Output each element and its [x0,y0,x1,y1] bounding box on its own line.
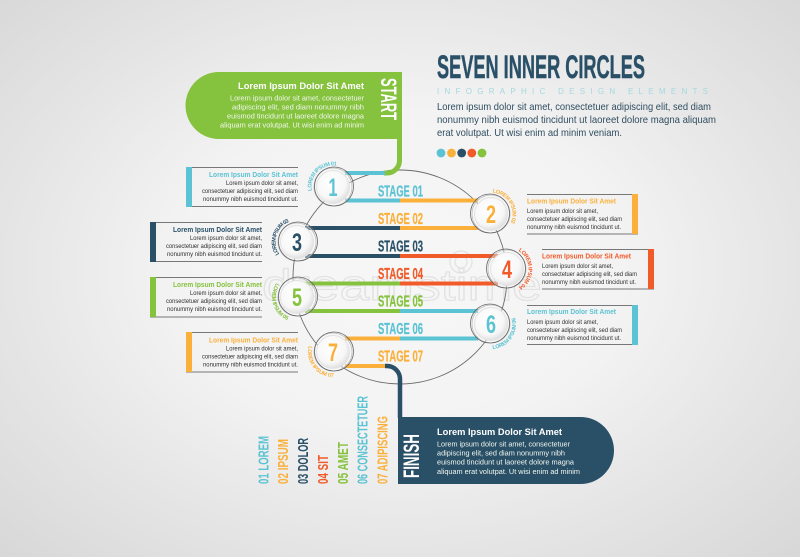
stage labels: STAGE 03 [378,238,423,256]
start text: Lorem Ipsum Dolor Sit Amet [238,81,365,92]
start connector [384,139,400,173]
title: SEVEN INNER CIRCLES [437,49,645,85]
node 1: 1 [328,174,338,202]
stage labels: STAGE 05 [378,294,423,310]
panel: item 3 [150,222,262,262]
panel: item 7 [186,332,298,372]
panel: item 5: Lorem Ipsum Dolor Sit Amet [173,280,262,289]
panel: item 6: consectetuer adipiscing elit, sed diam [527,327,622,334]
stage labels: STAGE 04 [378,266,423,283]
finish text: adipiscing elit, sed diam nonummy nibh [437,450,565,458]
node 4: 4 [502,256,512,284]
finish text [437,427,580,476]
vertical legend: 03 DOLOR [295,438,312,484]
panel: item 5: nonummy nibh euismod tincidunt ut. [167,306,262,313]
vertical legend: 01 LOREM [256,436,272,484]
panel: item 5: consectetuer adipiscing elit, sed diam [166,298,262,305]
start text [220,81,365,130]
colour dots [437,149,486,157]
subtitle: INFOGRAPHIC DESIGN ELEMENTS [437,87,708,96]
panel: item 6 [527,305,638,345]
panel: item 4: nonummy nibh euismod tincidunt ut. [542,279,636,286]
panel: item 2: Lorem ipsum dolor sit amet, [527,208,598,215]
panel: item 6: Lorem Ipsum Dolor Sit Amet [527,307,616,316]
panel: item 1: Lorem ipsum dolor sit amet, [226,180,298,187]
vertical legend: 05 AMET [335,442,352,484]
finish connector [385,366,400,418]
start text: adipiscing elit, sed diam nonummy nibh [232,104,364,112]
vertical legend [256,396,392,484]
panel: item 4: Lorem ipsum dolor sit amet, [542,263,613,270]
intro paragraph: nonummy nibh euismod tincidunt ut laoreet dolore magna aliquam [437,115,716,126]
node 3 [272,219,318,262]
watermark: dreamstime [262,261,542,310]
panel: item 5: Lorem ipsum dolor sit amet, [190,290,262,297]
node 4 [486,248,532,290]
vertical legend: 07 ADIPISCING [374,416,392,484]
panel: item 7: nonummy nibh euismod tincidunt ut. [203,362,298,368]
panel: item 7: Lorem ipsum dolor sit amet, [226,346,298,352]
node 3: 3 [292,229,302,257]
vertical legend: 06 CONSECTETUER [354,396,372,484]
panel: item 3: Lorem Ipsum Dolor Sit Amet [173,225,262,234]
finish text: aliquam erat volutpat. Ut wisi enim ad minim [437,469,580,476]
intro paragraph [437,102,716,139]
panel: item 1: Lorem Ipsum Dolor Sit Amet [209,170,298,179]
node 6: LOREM IPSUM 06 [492,318,516,349]
panel: item 3: consectetuer adipiscing elit, sed diam [166,243,262,250]
stage labels: STAGE 07 [378,348,423,366]
stage labels [378,184,423,366]
finish text: Lorem ipsum dolor sit amet, consectetuer [437,442,571,448]
panel: item 5 [150,277,262,317]
panel: item 1: consectetuer adipiscing elit, sed diam [202,188,298,195]
panel: item 2 [527,194,638,234]
start text: euismod tincidunt ut laoreet dolore magna [227,114,364,120]
panel: item 6: Lorem ipsum dolor sit amet, [527,319,598,326]
panel: item 1 [186,167,298,207]
node 1 [308,162,354,206]
start text: Lorem ipsum dolor sit amet, consectetuer [230,96,365,102]
panel: item 7: Lorem Ipsum Dolor Sit Amet [209,336,298,344]
panel: item 4: consectetuer adipiscing elit, sed diam [542,271,637,278]
large ring [293,170,507,384]
node 1: LOREM IPSUM 01 [308,162,336,191]
panel: item 2: nonummy nibh euismod tincidunt ut. [527,224,621,231]
stage labels: STAGE 01 [378,184,423,200]
start text: aliquam erat volutpat. Ut wisi enim ad minim [220,122,364,130]
panel: item 4: Lorem Ipsum Dolor Sit Amet [542,252,631,260]
panel: item 3: nonummy nibh euismod tincidunt ut. [167,251,262,258]
node 2: LOREM IPSUM 02 [492,188,516,224]
start panel [186,72,402,139]
panel: item 6: nonummy nibh euismod tincidunt ut. [527,335,621,342]
node 5: LOREM IPSUM 05 [272,283,289,320]
finish text: euismod tincidunt ut laoreet dolore magna [437,460,574,466]
panel: item 4 [542,249,654,289]
panel: item 7: consectetuer adipiscing elit, sed diam [202,354,298,360]
finish text: Lorem Ipsum Dolor Sit Amet [437,427,563,438]
finish panel [398,417,614,484]
panel: item 2: consectetuer adipiscing elit, sed diam [527,216,622,223]
node 6 [470,304,516,349]
start heading: START [376,78,401,120]
stage bars [305,173,498,366]
panel: item 3: Lorem ipsum dolor sit amet, [190,235,262,242]
intro paragraph: erat volutpat. Ut wisi enim ad minim veniam. [437,128,622,139]
node 2 [470,188,516,234]
intro paragraph: Lorem ipsum dolor sit amet, consectetuer adipiscing elit, sed diam [437,102,711,113]
node 5 [272,276,318,320]
stage labels: STAGE 06 [378,321,423,338]
node 5: 5 [292,284,302,312]
vertical legend: 04 SIT [315,455,332,484]
watermark [262,251,542,310]
stage labels: STAGE 02 [378,211,423,228]
node 2: 2 [486,201,496,229]
panel: item 2: Lorem Ipsum Dolor Sit Amet [527,196,616,206]
node 7: LOREM IPSUM 07 [308,346,334,377]
panel: item 1: nonummy nibh euismod tincidunt ut. [203,196,298,203]
node 3: LOREM IPSUM 03 [272,219,288,256]
node 7 [308,332,354,377]
finish heading: FINISH [399,434,424,478]
node 7: 7 [328,339,338,367]
node 6: 6 [486,311,496,339]
node 4: LOREM IPSUM 04 [518,248,532,290]
vertical legend: 02 IPSUM [275,439,292,484]
